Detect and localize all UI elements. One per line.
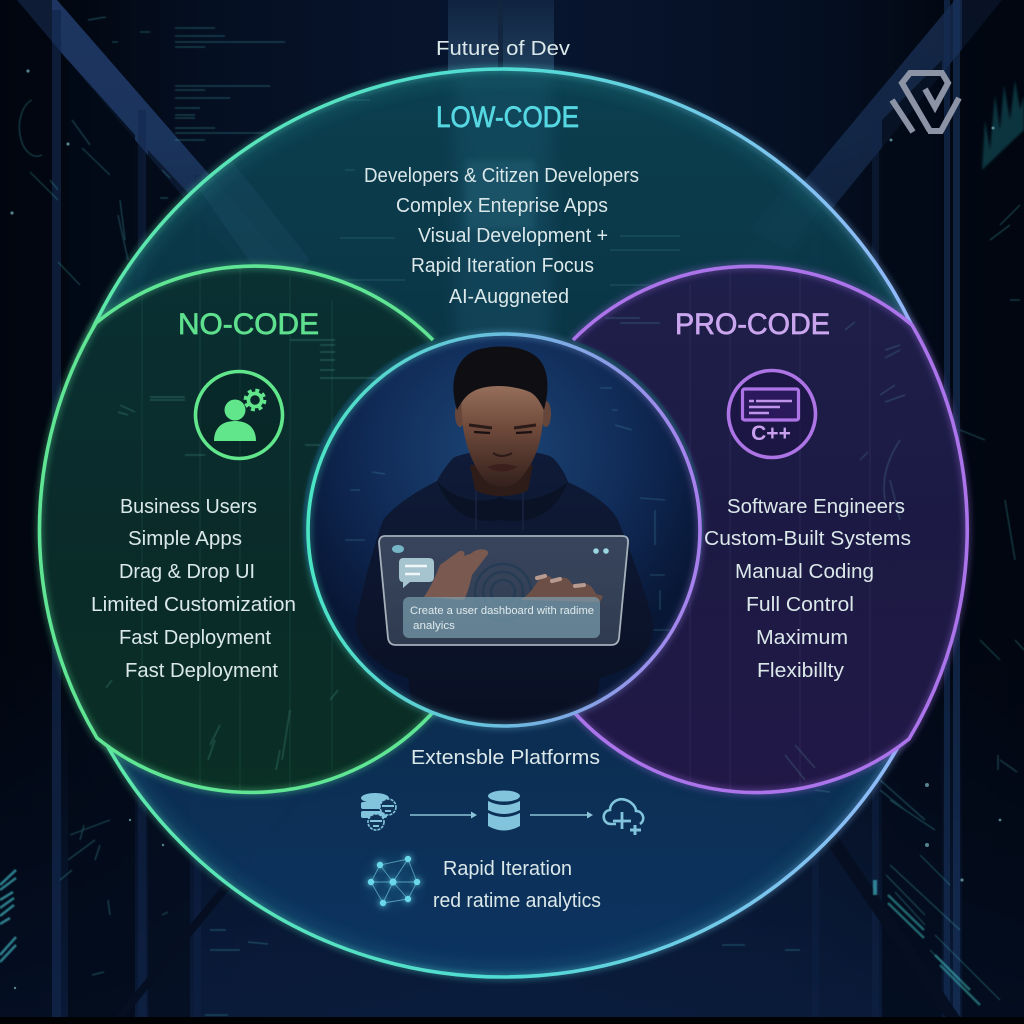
- icon: network nodes: [366, 854, 422, 908]
- chat bubble icon: [399, 558, 434, 588]
- text block: low-code features: [364, 165, 639, 308]
- prompt box: [403, 597, 600, 638]
- face: [462, 380, 543, 487]
- footer black strip: [0, 1017, 1024, 1024]
- text block: low-code features: AI-Auggneted: [449, 286, 569, 308]
- heading: low-code: LOW-CODE: [436, 101, 579, 134]
- text block: rapid iteration: red ratime analytics: [433, 890, 601, 912]
- ears: [455, 402, 463, 427]
- heading: no-code: NO-CODE: [178, 308, 319, 341]
- panel: centre circle with developer: [308, 334, 700, 735]
- prompt box: analyics: [413, 620, 456, 632]
- hud traces: [345, 388, 670, 630]
- icon: cloud with plus: [604, 799, 643, 835]
- ceiling light column: [448, 0, 554, 75]
- title: Future of Dev: [436, 38, 570, 60]
- icon: code window C++: [728, 370, 816, 458]
- text block: low-code features: Rapid Iteration Focus: [411, 255, 594, 277]
- icon: database: [488, 790, 520, 830]
- panel: pro-code lobe: [572, 266, 967, 793]
- arrow: database to cloud: [530, 812, 593, 818]
- text block: pro-code features: Maximum: [756, 627, 848, 649]
- text block: pro-code features: Manual Coding: [735, 561, 874, 583]
- arrow: cluster to database: [410, 812, 477, 818]
- text block: low-code features: Visual Development +: [418, 225, 608, 247]
- neck: [470, 465, 533, 496]
- icon: user with gear: [196, 372, 282, 458]
- right chart glow: [982, 80, 1024, 170]
- hoodie: [355, 450, 654, 735]
- heading: pro-code: PRO-CODE: [675, 308, 830, 341]
- bright data bars: [0, 870, 980, 1005]
- text block: no-code features: [91, 496, 296, 682]
- hair: [453, 346, 547, 410]
- hands: [424, 549, 603, 602]
- text block: pro-code features: Full Control: [746, 594, 854, 616]
- text block: no-code features: Fast Deployment: [125, 660, 278, 682]
- icon: code window C++: C++: [751, 422, 791, 445]
- text block: no-code features: Limited Customization: [91, 594, 296, 616]
- text block: pro-code features: Flexibillty: [757, 660, 844, 682]
- logo: [892, 73, 959, 132]
- icon: database cluster: [361, 793, 396, 830]
- text block: no-code features: Simple Apps: [128, 528, 242, 550]
- glass tablet: [379, 536, 628, 645]
- tablet rings: [474, 563, 532, 597]
- developer figure: [355, 346, 654, 735]
- text block: rapid iteration: [433, 858, 601, 912]
- prompt box: Create a user dashboard with radime: [410, 605, 594, 617]
- text block: pro-code features: Custom-Built Systems: [704, 528, 911, 550]
- text block: no-code features: Business Users: [120, 496, 257, 518]
- text block: low-code features: Developers & Citizen Developers: [364, 165, 639, 187]
- right rack structure: [730, 0, 1024, 1020]
- text block: rapid iteration: Rapid Iteration: [443, 858, 572, 880]
- text: extensible platforms: Extensble Platforms: [411, 747, 600, 769]
- panel: no-code lobe: [39, 266, 435, 792]
- left rack structure: [0, 0, 310, 1020]
- text block: no-code features: Fast Deployment: [119, 627, 271, 649]
- text block: pro-code features: Software Engineers: [727, 496, 905, 518]
- text block: pro-code features: [704, 496, 911, 682]
- text block: no-code features: Drag & Drop UI: [119, 561, 255, 583]
- text block: low-code features: Complex Enteprise Apps: [396, 195, 608, 217]
